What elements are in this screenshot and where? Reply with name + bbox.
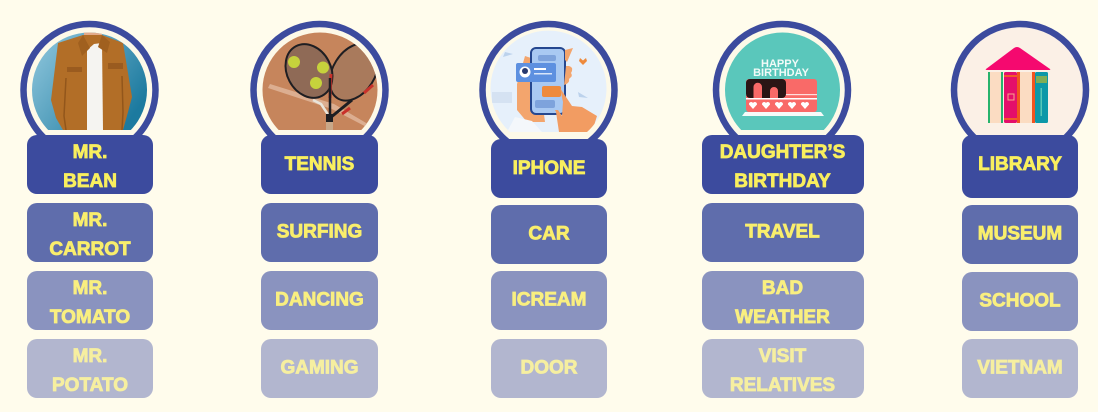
option: Mr. Tomato: MR.: [73, 278, 107, 299]
option: Dancing: DANCING: [275, 290, 364, 310]
option: Daughter's Birthday: DAUGHTER’S: [720, 142, 845, 163]
column: Tennis: [254, 24, 388, 398]
column: Mr. Bean: [24, 24, 156, 398]
icon: birthday cake: BIRTHDAY: [753, 67, 810, 79]
column: Library: [954, 24, 1086, 398]
option: Gaming: GAMING: [280, 358, 359, 378]
option: Mr. Potato: MR.: [73, 346, 107, 367]
option: Museum: MUSEUM: [978, 224, 1062, 244]
icon: jacket portrait: [24, 24, 156, 156]
option: Mr. Potato: [27, 339, 153, 398]
option: Mr. Potato: POTATO: [52, 375, 128, 396]
option: Mr. Carrot: MR.: [73, 210, 107, 231]
option: Travel: TRAVEL: [745, 222, 820, 242]
option: Mr. Bean: [27, 135, 153, 194]
option: Mr. Bean: MR.: [73, 142, 107, 163]
option: Gaming: [261, 339, 378, 398]
option: Mr. Carrot: CARROT: [49, 239, 131, 260]
option: Mr. Bean: BEAN: [63, 171, 117, 192]
option: Tennis: TENNIS: [285, 154, 354, 175]
option: Visit Relatives: RELATIVES: [730, 375, 835, 396]
option: School: [962, 272, 1078, 331]
option: Door: DOOR: [520, 358, 578, 378]
icon: birthday cake: HAPPY: [761, 58, 800, 70]
icon: birthday cake: [716, 24, 848, 156]
option: Tennis: [261, 135, 378, 194]
option: Daughter's Birthday: [702, 135, 864, 194]
option: Mr. Carrot: [27, 203, 153, 262]
option: Museum: [962, 205, 1078, 264]
option: Daughter's Birthday: BIRTHDAY: [734, 171, 831, 192]
option: Icream: [491, 271, 607, 330]
option: Travel: [702, 203, 864, 262]
icon: library of books: [954, 24, 1086, 156]
option: Surfing: [261, 203, 378, 262]
option: Visit Relatives: [702, 339, 864, 398]
option: Library: LIBRARY: [978, 154, 1062, 175]
option: School: SCHOOL: [979, 290, 1061, 312]
option: Bad Weather: [702, 271, 864, 330]
column: Daughter's Birthday: [702, 24, 864, 398]
option: Vietnam: [962, 339, 1078, 398]
option: Surfing: SURFING: [277, 222, 362, 242]
option: Library: [962, 135, 1078, 198]
option: Dancing: [261, 271, 378, 330]
option: iPhone: IPHONE: [513, 158, 585, 179]
option: Mr. Tomato: TOMATO: [50, 307, 130, 328]
option: Mr. Tomato: [27, 271, 153, 330]
option: Door: [491, 339, 607, 398]
option: Icream: ICREAM: [512, 290, 586, 310]
option: Visit Relatives: VISIT: [759, 346, 807, 367]
option: Bad Weather: BAD: [762, 278, 803, 299]
option: iPhone: [491, 139, 607, 198]
option: Car: [491, 205, 607, 264]
option: Car: CAR: [528, 224, 570, 244]
option: Vietnam: VIETNAM: [977, 358, 1063, 378]
option: Bad Weather: WEATHER: [735, 307, 830, 328]
icon: tennis rackets: [254, 24, 388, 156]
icon: hands holding phone: [482, 24, 614, 156]
column: iPhone: [482, 24, 614, 398]
